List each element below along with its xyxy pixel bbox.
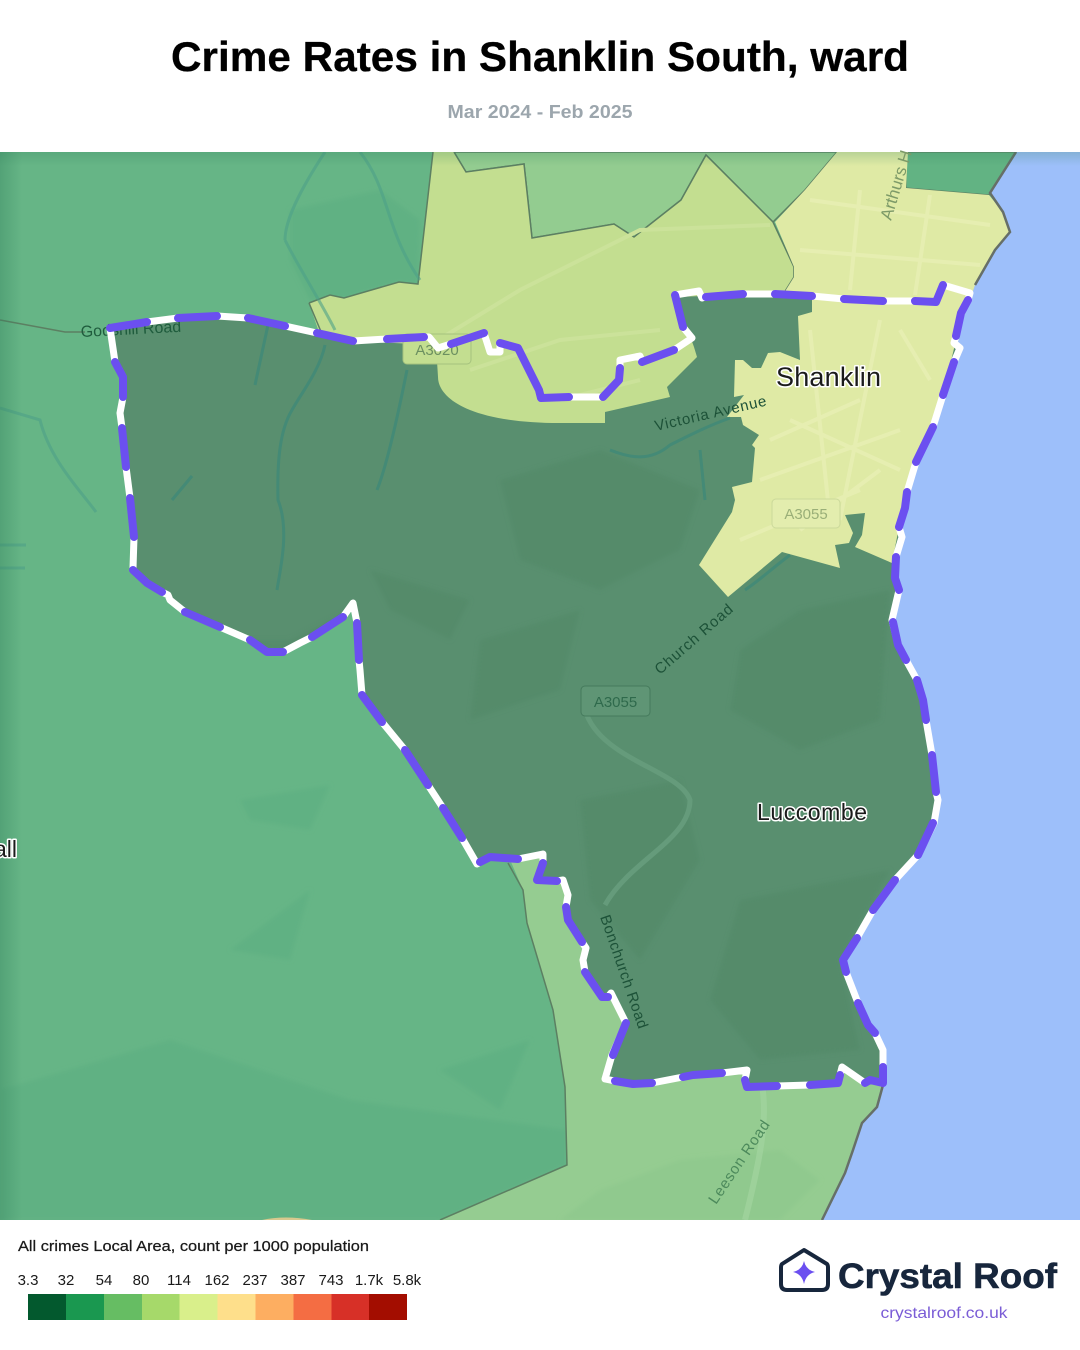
legend values: 80 [133, 1272, 149, 1289]
road badge: A3055 south [581, 686, 650, 716]
road label: Victoria Avenue: Victoria Avenue [653, 393, 768, 435]
yellow-green ward area [309, 152, 794, 423]
ward woodland patches [240, 450, 890, 1060]
Shanklin yellow ward area [699, 152, 1010, 597]
edge shading [0, 152, 12, 1220]
legend values [18, 1272, 422, 1289]
title: Crime Rates in Shanklin South, ward [171, 33, 909, 80]
top right green block [906, 152, 1016, 195]
logo wordmark: Crystal Roof [838, 1257, 1057, 1296]
icon: house with star [781, 1250, 828, 1290]
boundary purple dashes [110, 285, 968, 1087]
legend values: 743 [318, 1272, 344, 1289]
streams and roads [172, 325, 790, 590]
website link: crystalroof.co.uk [880, 1305, 1009, 1322]
north-west and southern woodland patches [0, 190, 567, 1220]
road label: Bonchurch Road: Bonchurch Road [596, 913, 651, 1031]
coastline [822, 152, 1016, 1220]
south light green area [440, 850, 883, 1220]
road label: Church Road: Church Road [651, 601, 737, 678]
sea [822, 152, 1080, 1220]
road label: Godshill Road: Godshill Road [80, 319, 182, 341]
place label: Shanklin: Shanklin [776, 362, 881, 392]
legend values: 5.8k [393, 1272, 422, 1289]
legend values: 387 [280, 1272, 306, 1289]
road label: Arthurs Hill: Arthurs H [877, 148, 916, 222]
boundary white line [110, 285, 970, 1087]
ward fill: Shanklin South [110, 285, 970, 1087]
legend values: 54 [96, 1272, 112, 1289]
legend values: 237 [242, 1272, 268, 1289]
north light green area [454, 152, 837, 238]
south road strip [745, 1085, 764, 1220]
logo: Crystal Roof [781, 1250, 1057, 1322]
road label: Leeson Road: Leeson Road [705, 1117, 774, 1207]
legend values: 3.3 [18, 1272, 38, 1289]
legend title: All crimes Local Area, count per 1000 population [18, 1238, 369, 1255]
date range subtitle: Mar 2024 - Feb 2025 [448, 102, 632, 122]
road badge: A3055 north: A3055 [784, 506, 828, 523]
legend values: 1.7k [355, 1272, 384, 1289]
place label: Luccombe: Luccombe [757, 799, 867, 825]
ward boundary [110, 285, 970, 1087]
legend values: 162 [204, 1272, 230, 1289]
legend [18, 1238, 422, 1320]
legend colour scale [28, 1294, 407, 1320]
choropleth map [0, 152, 1080, 1220]
road badge: A3020 [403, 334, 471, 364]
road badge: A3020: A3020 [415, 342, 459, 359]
road badge: A3055 south: A3055 [594, 694, 637, 711]
legend values: 32 [58, 1272, 74, 1289]
legend values: 114 [167, 1272, 191, 1289]
road badge: A3055 north [772, 499, 840, 528]
